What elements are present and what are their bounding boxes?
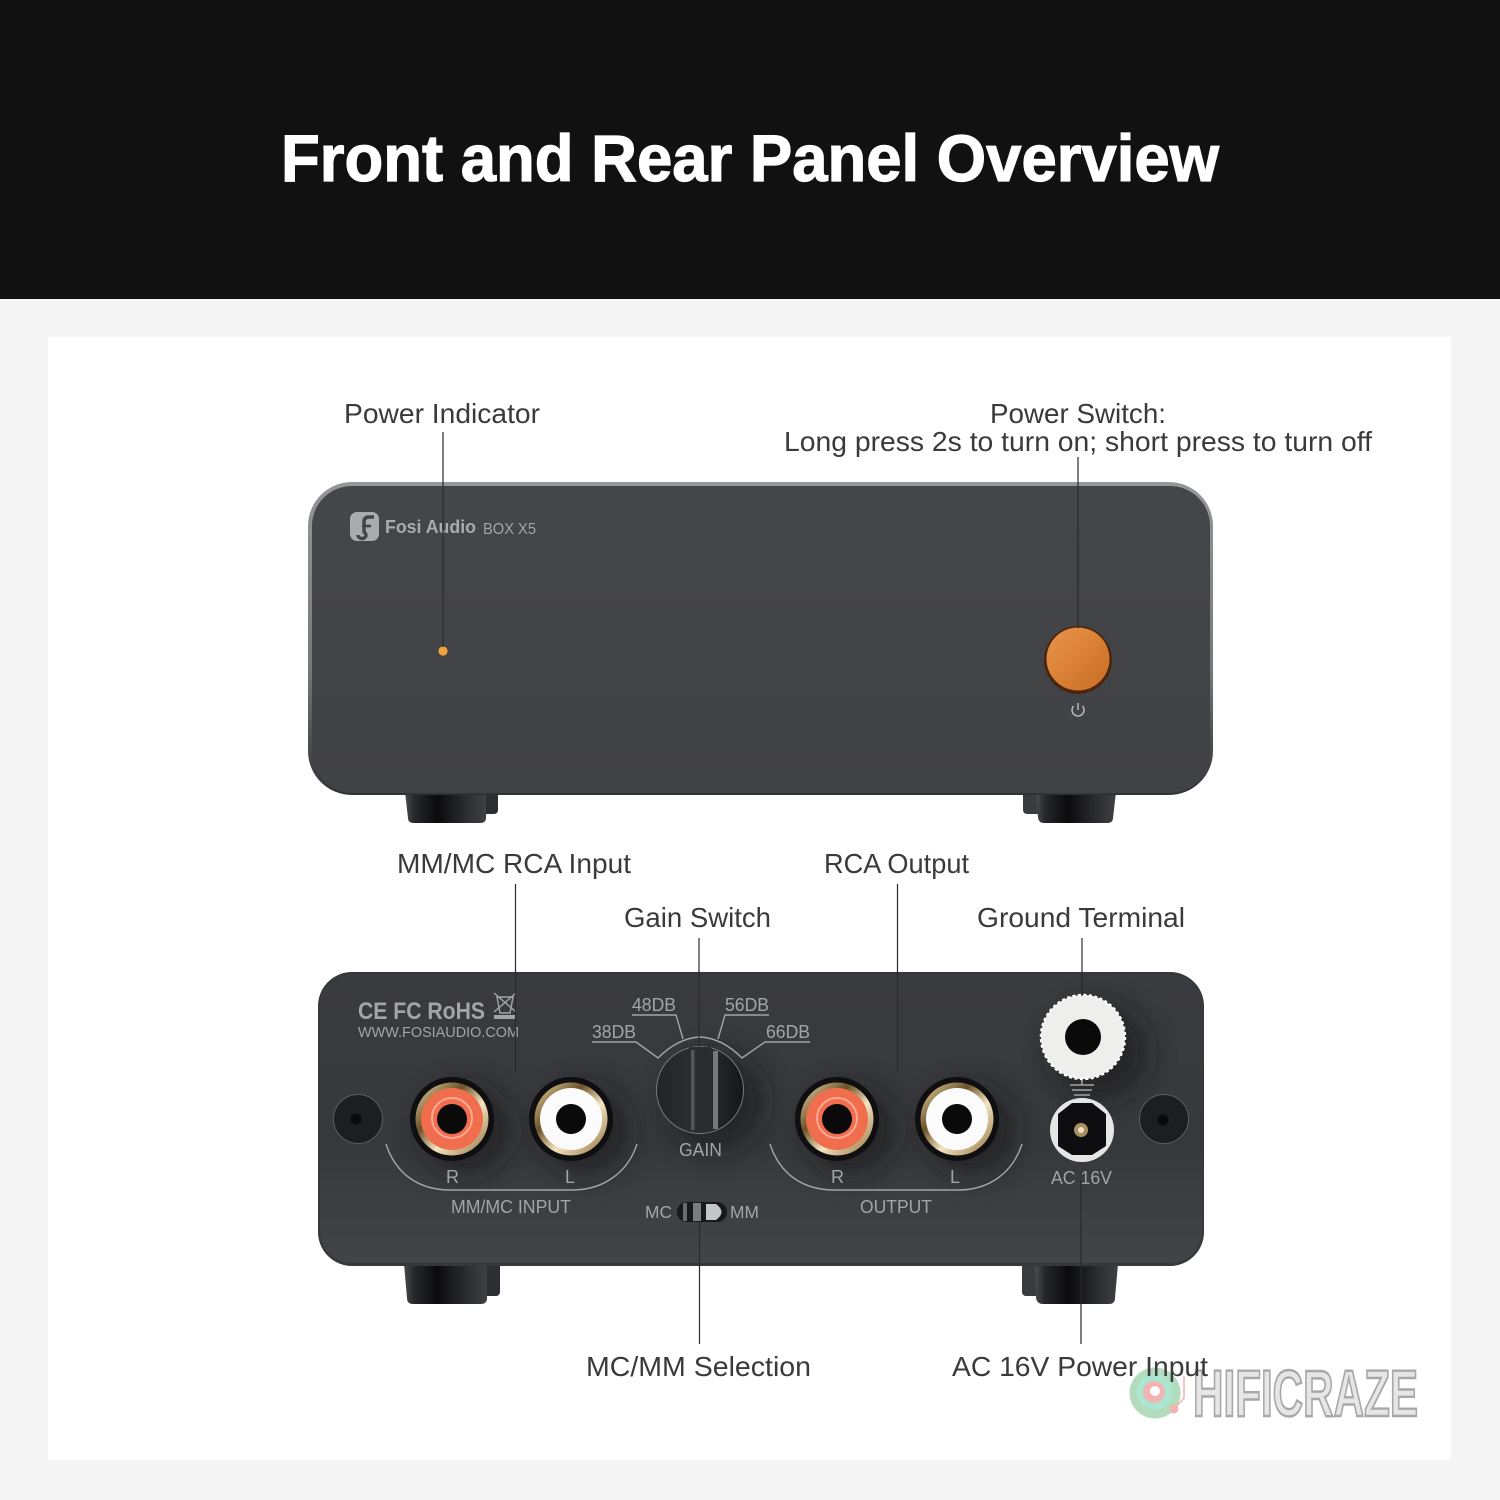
white content panel — [48, 337, 1451, 1460]
AC power socket — [1050, 1098, 1114, 1162]
callout: MC/MM selection: MC/MM Selection — [586, 1351, 811, 1382]
callout: MM/MC RCA input: MM/MC RCA Input — [397, 848, 631, 879]
power symbol — [1072, 703, 1084, 716]
gain 38DB: 38DB — [592, 1022, 636, 1042]
brand name: Fosi Audio — [385, 517, 476, 537]
callout: power switch — [784, 398, 1372, 628]
rear chassis — [318, 972, 1204, 1266]
callout: power switch: Power Switch: — [990, 398, 1166, 429]
front foot right — [1023, 790, 1116, 823]
gain scale — [592, 1015, 810, 1058]
watermark — [1130, 1356, 1418, 1430]
input L label: L — [565, 1167, 575, 1187]
watermark icon — [1130, 1368, 1184, 1418]
gain 48DB: 48DB — [632, 995, 676, 1015]
callout: ground terminal: Ground Terminal — [977, 902, 1185, 933]
title: Front and Rear Panel Overview — [281, 121, 1220, 195]
power indicator LED — [438, 646, 448, 656]
certification marks: CE FC RoHS — [358, 998, 485, 1025]
right screw — [1140, 1094, 1188, 1144]
panel: rear of device — [318, 972, 1204, 1304]
gain 56DB: 56DB — [725, 995, 769, 1015]
output caption: OUTPUT — [860, 1197, 932, 1217]
RCA input L — [529, 1077, 613, 1161]
power button — [1044, 626, 1112, 694]
certification marks — [358, 993, 519, 1041]
brand logo — [350, 512, 379, 541]
output L label: L — [950, 1167, 960, 1187]
RCA input R — [410, 1077, 494, 1161]
front foot left — [405, 790, 498, 823]
output bracket — [770, 1144, 1022, 1190]
rear foot right — [1022, 1262, 1118, 1304]
callout: AC 16V power input: AC 16V Power Input — [952, 1351, 1208, 1382]
AC caption: AC 16V — [1051, 1168, 1112, 1188]
front chassis — [308, 482, 1213, 795]
MM label: MM — [730, 1202, 759, 1222]
gain caption: GAIN — [679, 1140, 722, 1160]
header band — [0, 0, 1500, 299]
callout: power indicator: Power Indicator — [344, 398, 540, 429]
MC label: MC — [645, 1202, 672, 1222]
input caption: MM/MC INPUT — [451, 1197, 571, 1217]
ground terminal — [1041, 995, 1125, 1079]
callout: RCA output: RCA Output — [824, 848, 969, 879]
certification marks: WWW.FOSIAUDIO.COM — [358, 1024, 519, 1041]
RCA output L — [915, 1077, 999, 1161]
gain 66DB: 66DB — [766, 1022, 810, 1042]
rear foot left — [404, 1262, 500, 1304]
RCA output R — [795, 1077, 879, 1161]
gain knob — [656, 1046, 744, 1134]
ground symbol — [1070, 1080, 1094, 1095]
MC/MM slider — [677, 1202, 727, 1222]
left screw — [334, 1094, 382, 1144]
output R label: R — [831, 1167, 844, 1187]
callout: power switch: Long press 2s to turn on; short press to turn off — [784, 426, 1372, 457]
input R label: R — [446, 1167, 459, 1187]
model name: BOX X5 — [483, 521, 536, 538]
panel: front of device — [308, 482, 1213, 823]
callout: gain switch: Gain Switch — [624, 902, 771, 933]
input bracket — [386, 1144, 637, 1190]
soft shadows — [422, 1004, 1148, 1174]
